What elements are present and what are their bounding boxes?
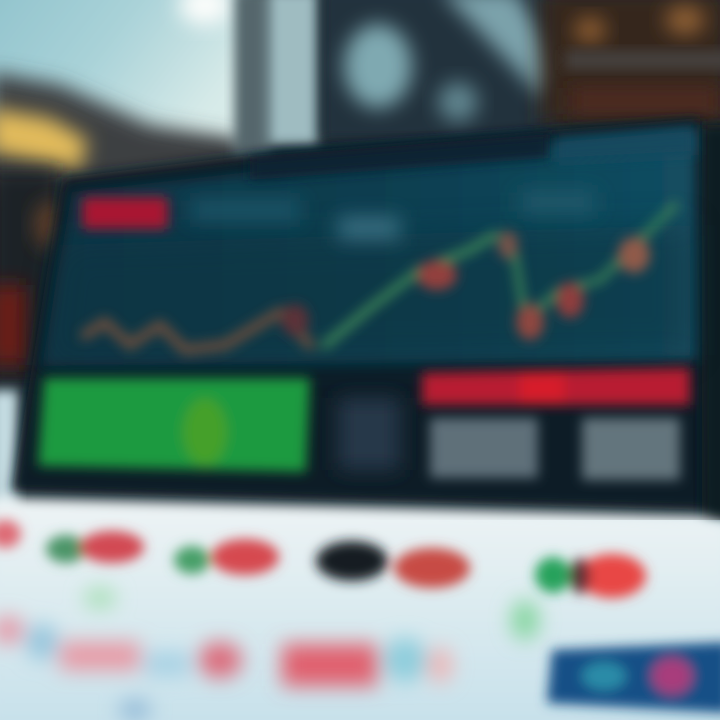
blue card: [547, 642, 720, 713]
blob row one: [0, 520, 646, 598]
green panel: [38, 378, 310, 472]
blob row two: [0, 588, 539, 720]
red header bar: [422, 368, 690, 405]
screen: [42, 130, 696, 366]
red tag: [82, 197, 168, 229]
panel: table with printed charts: [0, 498, 720, 720]
top right tab: [555, 127, 695, 162]
panel: monitor: [12, 118, 720, 520]
right edge: [702, 125, 720, 520]
top dark bar: [250, 134, 550, 180]
line chart: [85, 205, 675, 350]
header labels: [190, 192, 595, 239]
background: pillars and steel structure: [235, 0, 720, 160]
chart shade: [45, 225, 690, 365]
background: sky and building: [0, 0, 720, 520]
grey stat panel 1: [430, 418, 538, 478]
grey stat panel 2: [582, 418, 680, 480]
dark stat panel: [338, 398, 400, 470]
